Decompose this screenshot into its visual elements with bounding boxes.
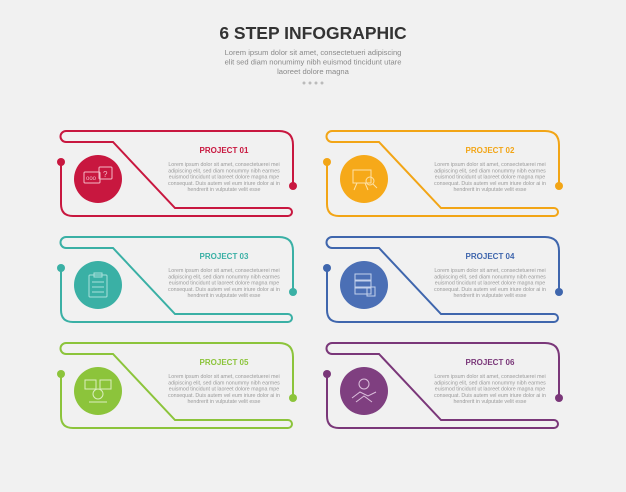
subtitle: Lorem ipsum dolor sit amet, consectetueri adipiscing bbox=[225, 48, 401, 57]
panel: project 02: PROJECT 02 bbox=[466, 146, 515, 155]
panel: project 04: PROJECT 04 bbox=[466, 252, 515, 261]
panel: project 01 bbox=[57, 131, 297, 216]
panel: project 04 bbox=[323, 237, 563, 322]
subtitle: elit sed diam nonumimy nibh euismod tincidunt utare bbox=[225, 58, 401, 66]
panel: project 06: PROJECT 06 bbox=[466, 358, 515, 367]
title: 6 STEP INFOGRAPHIC bbox=[219, 23, 407, 43]
dots decoration bbox=[302, 82, 324, 84]
panel: project 01: PROJECT 01 bbox=[200, 146, 249, 155]
subtitle bbox=[225, 48, 401, 76]
panel: project 01: ? bbox=[103, 170, 108, 179]
panel: project 03 bbox=[57, 237, 297, 322]
panel: project 03: PROJECT 03 bbox=[200, 252, 249, 261]
subtitle: laoreet dolore magna bbox=[277, 67, 350, 76]
panel: project 06 bbox=[323, 343, 563, 428]
panel: project 01: ooo bbox=[86, 176, 97, 182]
panel: project 05: PROJECT 05 bbox=[200, 358, 249, 367]
panel: project 05 bbox=[57, 343, 297, 428]
panel: project 02 bbox=[323, 131, 563, 216]
